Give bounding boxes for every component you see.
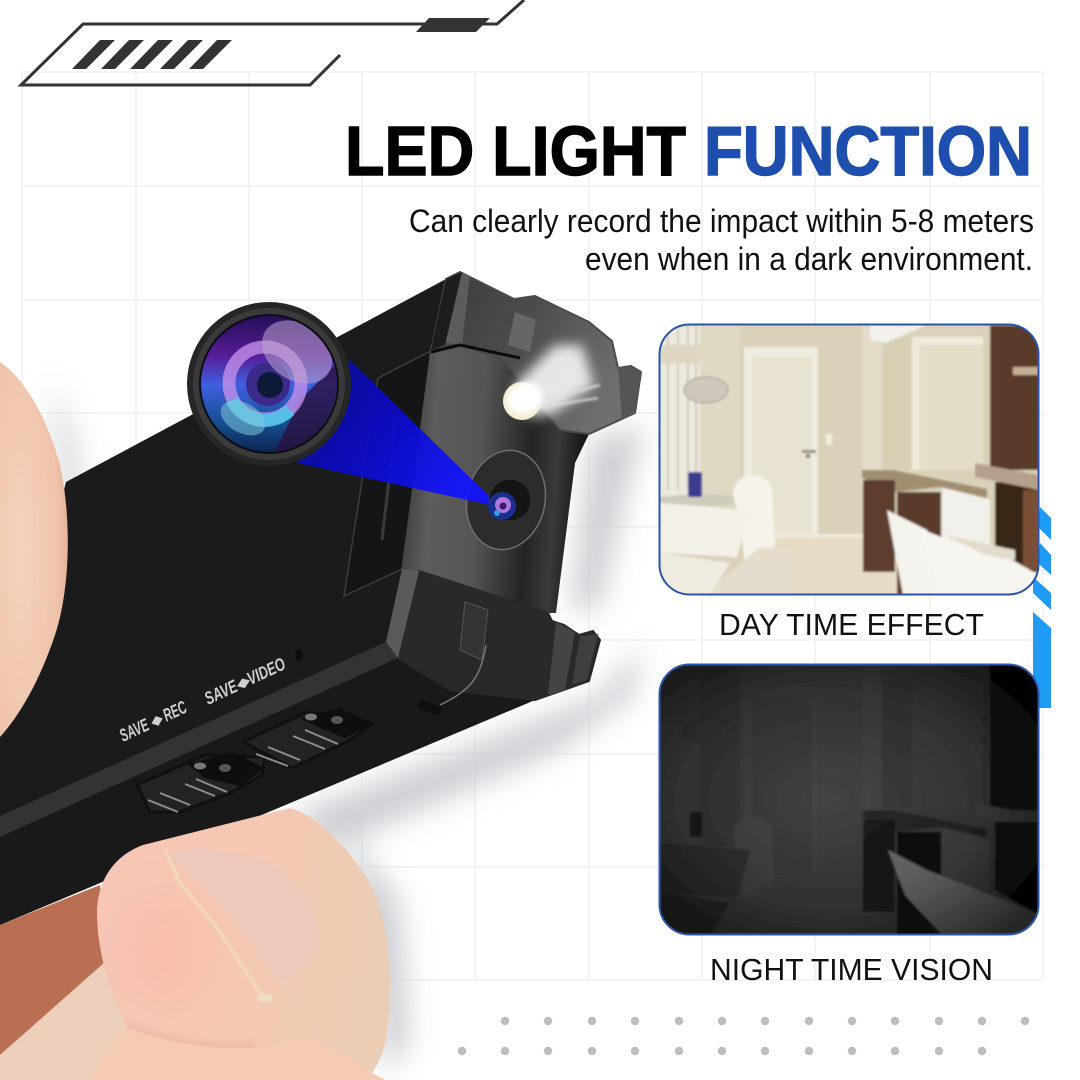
chair and sofa — [734, 820, 774, 879]
title — [345, 112, 1032, 190]
thumb — [97, 808, 390, 1073]
night vision photo — [659, 664, 1039, 935]
blue projection beam — [297, 360, 500, 507]
lower fingertip — [93, 1020, 385, 1080]
daytime caption: DAY TIME EFFECT — [719, 607, 984, 642]
finger behind thumb — [0, 885, 110, 1055]
daytime photo — [658, 324, 1039, 595]
mirror — [882, 340, 987, 467]
switch labels — [116, 654, 289, 746]
pendant lamp and vase — [684, 717, 728, 743]
subtitle text: Can clearly record the impact within 5-8 meters — [409, 203, 1034, 239]
hand: upper finger — [0, 362, 68, 737]
illuminated chair — [888, 850, 1037, 935]
lower front face — [0, 658, 535, 925]
subtitle text — [409, 203, 1034, 277]
title: FUNCTION — [704, 112, 1032, 190]
dark wood panel — [990, 665, 1039, 810]
front bevel strip — [0, 569, 419, 837]
large lens magnified view — [187, 302, 351, 466]
camera device held in hand — [0, 272, 641, 925]
pivoting camera hinge — [402, 345, 590, 613]
blue chevron stripes on the right edge — [1033, 507, 1051, 708]
curtain — [660, 326, 700, 496]
header decoration: outlined tab with stripes — [21, 0, 524, 85]
door — [744, 347, 818, 537]
night caption: NIGHT TIME VISION — [710, 952, 993, 987]
console table — [943, 830, 1030, 910]
sofa and pillows — [712, 546, 770, 594]
small camera lens — [488, 479, 531, 521]
dot pattern — [458, 1017, 1029, 1055]
memory card slot — [344, 351, 431, 596]
title: LED LIGHT — [345, 112, 686, 190]
glass table and vase — [660, 494, 734, 506]
floor — [770, 537, 900, 595]
switch labels: SAVE◂▸VIDEO — [201, 654, 289, 709]
slide switch: rec — [137, 752, 265, 812]
thumb shading — [126, 920, 254, 1048]
lower clip — [386, 569, 600, 716]
dining chair — [733, 475, 775, 565]
device body — [0, 279, 560, 925]
recess around small lens — [457, 443, 555, 557]
top hood with LED housing — [431, 272, 641, 434]
slide switch: video — [243, 708, 373, 768]
hand: thumb and lower fingers — [0, 808, 390, 1080]
pendant lamp — [684, 377, 728, 403]
soft shadows behind device and hand — [50, 380, 645, 1075]
white chairs at console — [887, 510, 947, 595]
microphone hole — [295, 649, 303, 661]
subtitle text: even when in a dark environment. — [585, 241, 1033, 277]
switch labels: SAVE ◂▸ REC — [116, 697, 191, 746]
console table — [940, 486, 1031, 571]
palm behind thumb — [0, 962, 210, 1080]
LED light glow — [498, 345, 600, 425]
wooden panel — [990, 325, 1039, 470]
thumbnail — [165, 849, 318, 985]
